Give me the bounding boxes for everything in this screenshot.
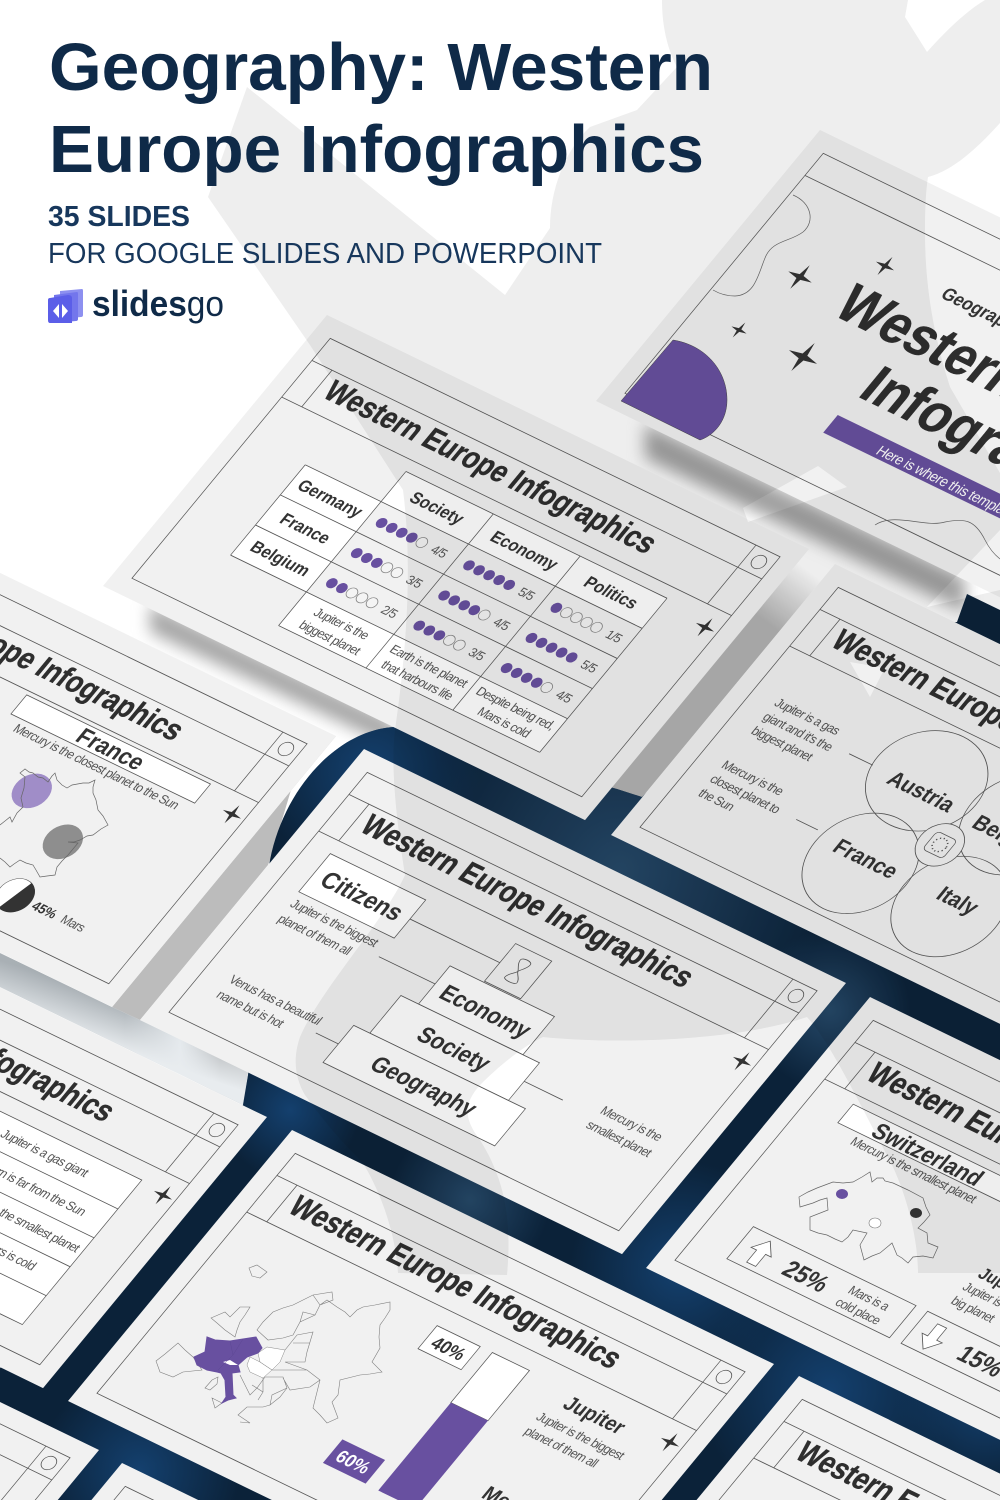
star one xyxy=(868,253,902,279)
table: 3/5 xyxy=(465,645,489,664)
pie chart xyxy=(0,873,43,918)
table: 5/5 xyxy=(515,584,539,603)
text: Jupiter: big planet xyxy=(948,1293,999,1325)
text: Jupiter: Jupiter is the biggest xyxy=(287,896,383,950)
label: Mars: Mars xyxy=(57,912,89,935)
decorative outlines xyxy=(713,195,1000,559)
tier: Geography xyxy=(323,1025,525,1146)
text: Jupiter: planet of them all xyxy=(521,1424,602,1470)
stat card: 25%: Mars is a xyxy=(845,1283,894,1314)
tier: Society xyxy=(370,995,539,1100)
heading: Switzerland: Switzerland xyxy=(866,1118,990,1191)
tier: Economy: Economy xyxy=(434,980,538,1043)
tier: Geography: Geography xyxy=(365,1051,483,1121)
slide title: Western Europe Infographics xyxy=(354,809,701,994)
table: 4/5 xyxy=(552,687,576,706)
slide frame xyxy=(646,997,1000,1500)
table: 1/5 xyxy=(602,627,626,646)
star two xyxy=(779,260,821,294)
white list rows xyxy=(0,1044,142,1325)
main title: Geography: Western xyxy=(49,30,713,105)
black marker xyxy=(910,1208,922,1218)
navy background xyxy=(0,594,1000,1500)
table: 2/5 xyxy=(378,602,401,621)
description: Mercury is the closest planet to the Sun xyxy=(10,721,183,812)
table: 3/5 xyxy=(403,572,426,591)
slide frame xyxy=(611,564,1000,1069)
label: 60%: 60% xyxy=(331,1447,375,1478)
heading: Citizens: Citizens xyxy=(314,867,409,927)
table: Belgium xyxy=(246,538,314,580)
purple marker xyxy=(3,768,60,814)
slide frame xyxy=(0,883,267,1388)
background silhouette overlay xyxy=(208,0,1000,1275)
star four xyxy=(777,336,829,378)
slide: title slide xyxy=(596,130,1000,635)
logo icon xyxy=(48,289,83,323)
label: France: France xyxy=(828,834,904,883)
connector lines xyxy=(316,919,626,1138)
slide: list xyxy=(0,883,267,1388)
text: Jupiter: Jupiter is a gas xyxy=(771,695,844,738)
Switzerland outline xyxy=(799,1172,938,1263)
text: Jupiter: biggest planet xyxy=(748,723,817,764)
stat card: 15% xyxy=(901,1311,1000,1422)
table: Economy xyxy=(486,527,563,574)
slide frame xyxy=(140,749,846,1254)
text: Mercury: Mercury is the xyxy=(718,757,788,798)
label: Austria: Austria xyxy=(882,766,962,817)
value: 45%: 45% xyxy=(28,898,61,922)
label: Italy: Italy xyxy=(931,881,985,920)
main title: Europe Infographics xyxy=(49,112,704,187)
slide: bottom left xyxy=(0,1216,99,1500)
slide frame xyxy=(68,1130,774,1500)
shadow: between slides xyxy=(0,424,965,1105)
list text: Jupiter is a gas giant xyxy=(0,1126,93,1180)
heading: France: France xyxy=(71,723,151,775)
white marker xyxy=(869,1218,881,1228)
map of Europe xyxy=(156,1265,390,1423)
slide frame xyxy=(575,1376,1000,1500)
text: Mercury: the Sun xyxy=(695,785,738,814)
purple shape xyxy=(621,340,727,440)
table: France xyxy=(276,510,335,548)
table: Politics xyxy=(580,573,643,613)
slide: Europe map xyxy=(68,1130,774,1500)
table: that harbours life xyxy=(378,657,457,703)
slide background xyxy=(596,130,1000,635)
tier: Economy xyxy=(418,966,554,1055)
pyramid top with icon xyxy=(484,944,552,999)
text: Mercury: closest planet to xyxy=(707,771,784,816)
stat card: 25% xyxy=(727,1227,916,1338)
table: Mars is cold xyxy=(474,704,535,741)
centre emblem xyxy=(905,817,975,873)
text: Venus: name but is hot xyxy=(213,987,288,1031)
slide: comparison table xyxy=(103,315,809,820)
table: biggest planet xyxy=(296,617,365,658)
subtitle: slide count: 35 SLIDES xyxy=(48,201,190,233)
text: Jupiter: giant and it's the xyxy=(760,709,837,754)
table: Society xyxy=(405,488,469,528)
table: 4/5 xyxy=(428,542,451,561)
slide frame xyxy=(625,153,1000,612)
slide title: Western Europe Infographics xyxy=(317,375,664,560)
stat card: 25%: cold place xyxy=(832,1295,885,1328)
slide frame xyxy=(103,315,809,820)
slide: venn diagram xyxy=(611,564,1000,1069)
table: Germany xyxy=(293,476,367,521)
purple marker xyxy=(836,1189,848,1199)
label: 60% xyxy=(323,1439,385,1484)
table: Earth is the planet xyxy=(387,642,472,691)
venn petals xyxy=(773,712,1000,974)
slide: bottom right xyxy=(575,1376,1000,1500)
tier: Society: Society xyxy=(411,1021,497,1076)
white label box xyxy=(11,695,210,803)
heading: Jupiter: Jupiter xyxy=(558,1392,631,1439)
grey marker xyxy=(34,819,91,865)
text: Jupiter: planet of them all xyxy=(275,911,355,958)
stat card: 25%: 25% xyxy=(776,1256,835,1298)
table: Jupiter is the xyxy=(310,605,373,643)
table: 5/5 xyxy=(577,657,601,676)
slide title: Western Europe Infographics xyxy=(282,1190,629,1375)
text: Mercury: Mercury is the xyxy=(597,1103,666,1144)
stacked bar xyxy=(378,1352,529,1500)
connector lines xyxy=(795,754,873,830)
subtitle: platforms: FOR GOOGLE SLIDES AND POWERPOINT xyxy=(48,238,602,270)
main title xyxy=(49,30,713,187)
table xyxy=(203,435,667,752)
star three xyxy=(725,319,753,341)
label: 40%: 40% xyxy=(426,1333,470,1364)
slide: France map xyxy=(0,502,336,1007)
slide: bottom centre xyxy=(0,1463,604,1500)
slide frame xyxy=(0,502,336,1007)
slide: Switzerland map xyxy=(646,997,1000,1500)
label: 40% xyxy=(418,1326,480,1370)
table: 4/5 xyxy=(490,614,514,633)
France outline xyxy=(0,769,108,877)
white label box xyxy=(838,1104,1000,1204)
text: Jupiter: Jupiter is the biggest xyxy=(533,1409,629,1463)
text: Venus: Venus has a beautiful xyxy=(226,972,325,1028)
description: Mercury is the smallest planet xyxy=(847,1134,981,1206)
table: Despite being red, xyxy=(473,684,559,733)
slide: pyramid diagram xyxy=(140,749,846,1254)
purple subtitle bar xyxy=(823,415,1000,559)
text: Mercury: smallest planet xyxy=(583,1117,656,1160)
box: Citizens xyxy=(299,854,426,938)
logo wordmark: slidesgo xyxy=(92,283,224,324)
